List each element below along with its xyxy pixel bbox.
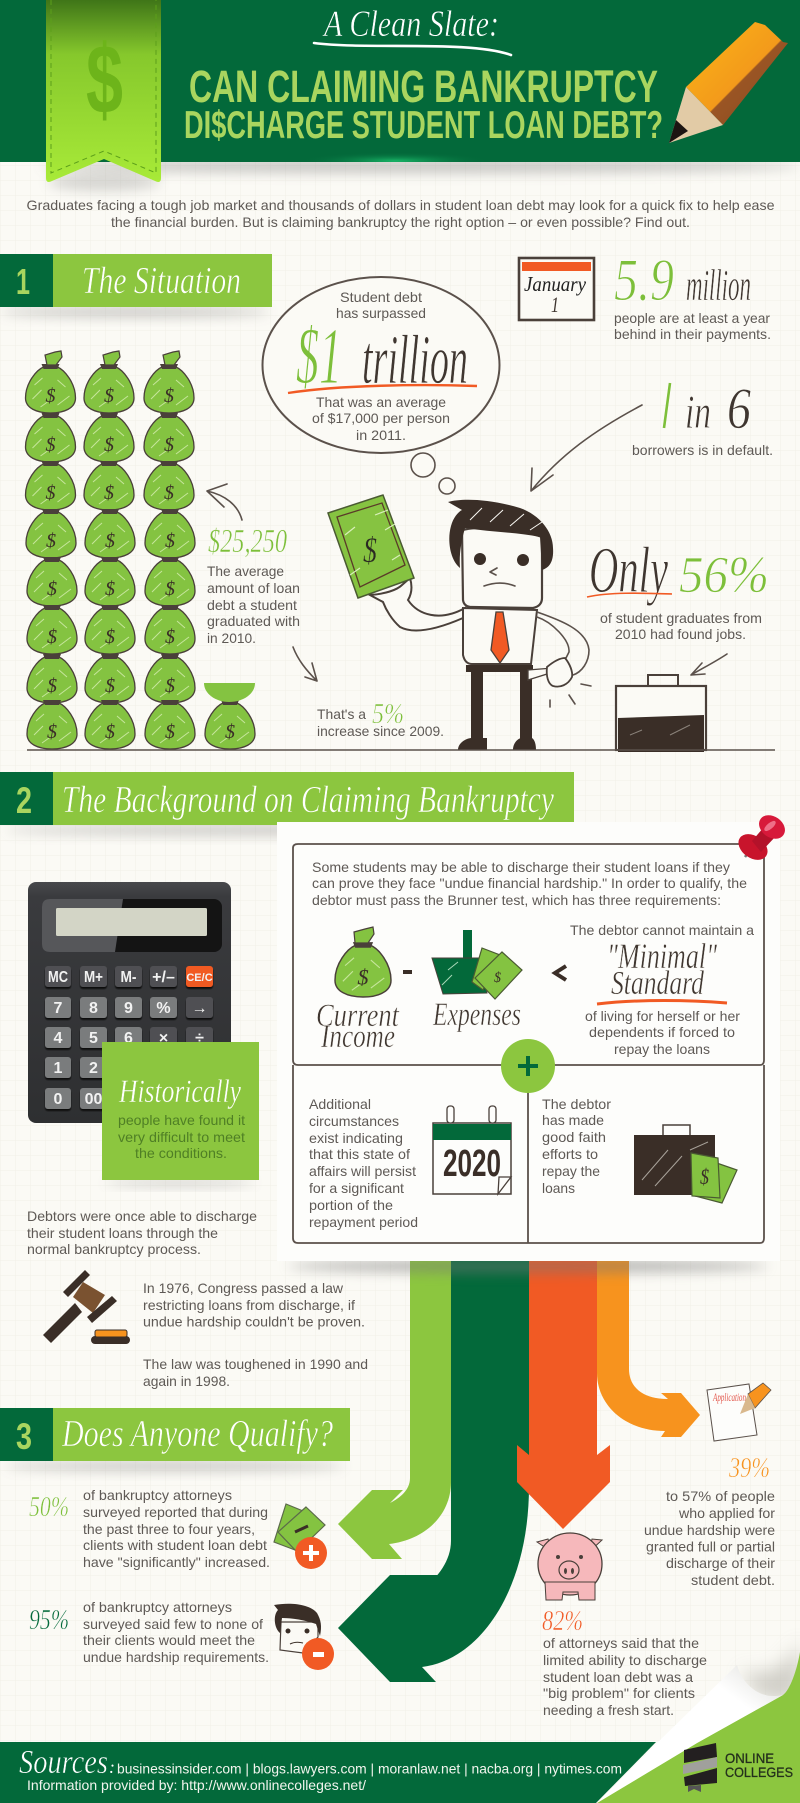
stat: $25,250: graduated with xyxy=(207,613,300,629)
section 2 heading: The Background on Claiming Bankruptcy xyxy=(62,779,554,821)
stat: only 56%: 2010 had found jobs. xyxy=(615,626,746,642)
callout: historically: very difficult to meet xyxy=(118,1129,245,1145)
stat: only 56%: Only xyxy=(589,534,668,607)
keypad: MC xyxy=(48,969,68,986)
thought bubble: $1 trillion: has surpassed xyxy=(336,305,426,321)
stat: 5.9 million: people are at least a year xyxy=(614,310,770,326)
icon: calendar january: January xyxy=(524,272,587,296)
stat: 5% increase: increase since 2009. xyxy=(317,723,444,739)
requirement: minimal standard: Standard xyxy=(611,965,705,1002)
chart: money bag stacks: $ xyxy=(47,578,57,600)
ground line xyxy=(27,749,775,751)
intro text: can prove they face "undue financial hardship." In order to qualify, the xyxy=(312,875,747,891)
callout: historically xyxy=(102,1042,259,1186)
icon: calendar 2020: 2020 xyxy=(443,1143,501,1185)
sources: Sources xyxy=(19,1744,108,1781)
arrows: flowing from the panel xyxy=(338,1261,700,1682)
section 3 heading: 3 xyxy=(16,1416,32,1457)
chart: money bag stacks: $ xyxy=(165,530,175,552)
chart: money bag stacks: $ xyxy=(104,434,114,456)
keypad: CE/C xyxy=(186,972,213,984)
chart: money bag stacks: $ xyxy=(165,675,175,697)
section 2 heading xyxy=(0,772,574,835)
stat: 39%: discharge of their xyxy=(666,1555,775,1571)
chart: money bag stacks: $ xyxy=(164,482,174,504)
arrow: orange to 39% xyxy=(597,1261,700,1437)
section 1 heading: 1 xyxy=(16,261,30,302)
stat: 5% increase xyxy=(317,699,444,739)
callout: historically: the conditions. xyxy=(135,1145,227,1161)
intro text: debtor must pass the Brunner test, which has three requirements: xyxy=(312,892,721,908)
requirement: additional circumstances: for a significant xyxy=(309,1180,404,1196)
intro text: Some students may be able to discharge their student loans if they xyxy=(312,859,730,875)
header banner xyxy=(0,0,800,173)
ribbon with dollar sign xyxy=(46,0,161,191)
callout: historically: Historically xyxy=(118,1074,241,1110)
stat: 95% of attorneys: surveyed said few to none of xyxy=(83,1616,263,1632)
stat: 50% of attorneys: surveyed reported that during xyxy=(83,1504,268,1520)
chart: money bag stacks: $ xyxy=(47,721,57,743)
keypad: × xyxy=(159,1030,168,1047)
thought bubble: $1 trillion: trillion xyxy=(362,322,468,399)
stat: 82% of attorneys xyxy=(542,1605,707,1718)
stat: 1 in 6: in xyxy=(685,386,711,439)
keypad: +/– xyxy=(152,969,175,986)
keypad: 2 xyxy=(89,1060,98,1077)
chart: money bag stacks xyxy=(26,351,255,749)
stat: only 56%: of student graduates from xyxy=(600,610,762,626)
icon: briefcase partly filled xyxy=(616,675,706,752)
stat: $25,250: in 2010. xyxy=(207,630,256,646)
raised arm and hand xyxy=(370,578,465,630)
requirement: additional circumstances: Additional xyxy=(309,1096,371,1112)
section 3 heading: Does Anyone Qualify? xyxy=(61,1413,333,1455)
text: 1976 law history xyxy=(143,1280,368,1389)
thought bubble: $1 trillion: That was an average xyxy=(316,394,446,410)
requirement: good faith efforts: has made xyxy=(542,1112,604,1128)
requirement: additional circumstances: repayment period xyxy=(309,1214,418,1230)
illustration: worried man holding a bill xyxy=(328,495,591,750)
keypad: 4 xyxy=(54,1030,63,1047)
keypad: 9 xyxy=(124,1000,133,1017)
logo: online colleges xyxy=(683,1743,793,1792)
chart: money bag stacks: $ xyxy=(225,721,235,743)
text: debtors once able: normal bankruptcy process. xyxy=(27,1241,201,1257)
stat: 39% xyxy=(644,1452,775,1588)
icon: basket with money, expenses xyxy=(432,930,522,1033)
stat: only 56%: 56% xyxy=(679,547,769,604)
stat: 39%: who applied for xyxy=(678,1505,775,1521)
icon: briefcase with money: $ xyxy=(700,1164,709,1189)
icon: calculator xyxy=(28,882,231,1123)
sources: Information provided by: http://www.onlinecolleges.net/ xyxy=(27,1777,366,1793)
icon: money bag, current income: $ xyxy=(357,965,369,990)
sources xyxy=(19,1744,622,1793)
chart: money bag stacks: $ xyxy=(46,434,56,456)
requirement: good faith efforts: loans xyxy=(542,1180,575,1196)
keypad: 00 xyxy=(85,1091,102,1108)
chart: money bag stacks: $ xyxy=(104,385,114,407)
chart: money bag stacks: $ xyxy=(46,530,56,552)
chart: money bag stacks: $ xyxy=(46,482,56,504)
icon: pencil xyxy=(669,22,788,143)
chart: money bag stacks: $ xyxy=(165,721,175,743)
stat: 1 in 6: borrowers is in default. xyxy=(632,442,773,458)
stat: 50% of attorneys: have "significantly" increased. xyxy=(83,1554,270,1570)
thought bubble: $1 trillion: Student debt xyxy=(340,289,422,305)
chart: money bag stacks: $ xyxy=(105,578,115,600)
keypad: % xyxy=(156,1000,171,1017)
arrow: to 5% increase xyxy=(293,647,317,681)
stat: 95% of attorneys: their clients would meet the xyxy=(83,1632,255,1648)
stat: 1 in 6 xyxy=(632,376,773,458)
section 1 heading xyxy=(0,254,272,317)
stat: 50% of attorneys: 50% xyxy=(29,1492,69,1523)
keypad: 0 xyxy=(54,1091,63,1108)
stat: 5.9 million: behind in their payments. xyxy=(614,326,771,342)
stat: $25,250: debt a student xyxy=(207,597,297,613)
stat: $25,250: The average xyxy=(207,563,284,579)
chart: money bag stacks: $ xyxy=(46,385,56,407)
arrow: to money bags xyxy=(207,484,242,520)
chart: money bag stacks: $ xyxy=(164,385,174,407)
stat: 82% of attorneys: student loan debt was a xyxy=(543,1669,693,1685)
sources: businessinsider.com | blogs.lawyers.com | moranlaw.net | nacba.org | nytimes.com xyxy=(117,1760,622,1776)
chart: money bag stacks: $ xyxy=(165,578,175,600)
keypad xyxy=(45,966,213,1109)
text: 1976 law history: again in 1998. xyxy=(143,1373,230,1389)
footer with page curl xyxy=(0,1640,800,1803)
stat: 39%: undue hardship were xyxy=(644,1522,775,1538)
icon: money bag, current income xyxy=(316,927,400,1055)
arrow: light green to 50% xyxy=(338,1261,451,1559)
chart: money bag stacks: $ xyxy=(164,434,174,456)
intro text xyxy=(26,197,775,230)
keypad: 6 xyxy=(124,1030,133,1047)
icon: worried face with minus xyxy=(274,1604,334,1670)
arrow: red-orange to 82% xyxy=(517,1261,610,1529)
requirement: minimal standard: The debtor cannot maintain a xyxy=(570,922,754,938)
requirement: good faith efforts: repay the xyxy=(542,1163,600,1179)
requirement: additional circumstances: portion of the xyxy=(309,1197,393,1213)
text: 1976 law history: restricting loans from discharge, if xyxy=(143,1297,355,1313)
stat: 5.9 million: 5.9 xyxy=(614,247,674,313)
stat: 50% of attorneys: clients with student loan debt xyxy=(83,1537,267,1553)
chart: money bag stacks: $ xyxy=(105,721,115,743)
stat: 5% increase: That's a xyxy=(317,706,366,722)
stat: 5% increase: 5% xyxy=(372,699,404,730)
logo: online colleges: COLLEGES xyxy=(725,1764,793,1780)
icon: application with pencil: Application xyxy=(712,1390,746,1404)
thought bubble: $1 trillion: $1 xyxy=(296,313,342,401)
subtitle: a clean slate: A Clean Slate: xyxy=(322,4,499,45)
plus circle xyxy=(501,1039,555,1093)
stat: $25,250: $25,250 xyxy=(208,523,287,560)
requirement: additional circumstances: that this state of xyxy=(309,1146,410,1162)
requirement: minimal standard xyxy=(570,922,754,1057)
bill held up: $ xyxy=(363,530,377,570)
requirement: additional circumstances xyxy=(309,1096,418,1230)
requirement: good faith efforts xyxy=(542,1096,611,1196)
text: debtors once able: Debtors were once able to discharge xyxy=(27,1208,257,1224)
icon: calendar january xyxy=(519,258,594,320)
torso xyxy=(463,608,537,664)
stat: 82% of attorneys: needing a fresh start. xyxy=(543,1702,674,1718)
minus sign xyxy=(403,970,412,974)
requirement: additional circumstances: affairs will persist xyxy=(309,1163,416,1179)
title xyxy=(184,4,663,147)
lowered arm, hand and empty pocket xyxy=(528,612,591,707)
face xyxy=(474,553,529,586)
section 3 heading xyxy=(0,1408,350,1471)
text: 1976 law history: The law was toughened in 1990 and xyxy=(143,1356,368,1372)
stat: $25,250 xyxy=(207,523,300,646)
section 2 heading: 2 xyxy=(16,780,32,821)
ribbon with dollar sign: $ xyxy=(86,24,123,134)
text: debtors once able xyxy=(27,1208,257,1257)
intro text xyxy=(312,859,747,908)
arrow: dark green to 95% xyxy=(338,1261,529,1682)
requirement: additional circumstances: circumstances xyxy=(309,1113,399,1129)
keypad: M+ xyxy=(84,969,103,986)
head xyxy=(462,527,542,608)
text: 1976 law history: undue hardship couldn't be proven. xyxy=(143,1314,365,1330)
keypad: 1 xyxy=(54,1060,63,1077)
chart: money bag stacks: $ xyxy=(47,626,57,648)
keypad: 7 xyxy=(54,1000,63,1017)
stat: 82% of attorneys: 82% xyxy=(542,1605,583,1637)
section 1 heading: The Situation xyxy=(82,260,241,302)
stat: 39%: student debt. xyxy=(691,1572,775,1588)
stat: 95% of attorneys xyxy=(29,1599,269,1665)
icon: money with plus xyxy=(274,1504,327,1569)
tie xyxy=(491,612,509,663)
thought bubble: $1 trillion: of $17,000 per person xyxy=(312,410,450,426)
chart: money bag stacks: $ xyxy=(105,626,115,648)
text: debtors once able: their student loans through the xyxy=(27,1225,218,1241)
requirement: minimal standard: "Minimal" xyxy=(607,936,718,976)
stat: 50% of attorneys: of bankruptcy attorneys xyxy=(83,1487,232,1503)
belt and legs xyxy=(458,665,536,750)
stat: 39%: 39% xyxy=(728,1452,770,1484)
icon: piggy bank xyxy=(537,1533,602,1600)
thought bubble: $1 trillion: in 2011. xyxy=(356,427,406,443)
stat: 50% of attorneys: the past three to four years, xyxy=(83,1521,255,1537)
icon: basket with money, expenses: Expenses xyxy=(432,997,521,1033)
text: 1976 law history: In 1976, Congress passed a law xyxy=(143,1280,344,1296)
stat: only 56% xyxy=(587,534,769,642)
icon: calendar 2020 xyxy=(433,1106,511,1194)
icon: money bag, current income: Income xyxy=(320,1019,395,1055)
bill held up xyxy=(328,495,414,598)
icon: application with pencil xyxy=(707,1383,771,1441)
arrow: 1 in 6 to man xyxy=(531,405,642,491)
requirement: additional circumstances: exist indicating xyxy=(309,1130,403,1146)
arrow: to briefcase xyxy=(691,654,727,675)
stat: 5.9 million xyxy=(614,247,771,342)
hair xyxy=(448,500,553,570)
callout: historically: people have found it xyxy=(118,1112,245,1128)
chart: money bag stacks: $ xyxy=(104,482,114,504)
stat: 39%: granted full or partial xyxy=(646,1538,775,1554)
requirement: minimal standard: of living for herself or her xyxy=(585,1008,740,1024)
chart: money bag stacks: $ xyxy=(47,675,57,697)
stat: 95% of attorneys: of bankruptcy attorneys xyxy=(83,1599,232,1615)
stat: 82% of attorneys: of attorneys said that the xyxy=(543,1635,699,1651)
intro text: the financial burden. But is claiming bankruptcy the right option – or even possible? Find out. xyxy=(111,214,690,230)
subtitle: a clean slate xyxy=(314,4,511,55)
chart: money bag stacks: $ xyxy=(105,530,115,552)
requirement: minimal standard: repay the loans xyxy=(614,1041,710,1057)
chart: money bag stacks: $ xyxy=(105,675,115,697)
icon: money bag, current income: Current xyxy=(316,998,400,1034)
stat: 95% of attorneys: undue hardship requirements. xyxy=(83,1649,269,1665)
icon: basket with money, expenses: $ xyxy=(494,970,501,986)
stat: 1 in 6: 6 xyxy=(727,376,751,441)
stat: 50% of attorneys xyxy=(29,1487,270,1570)
icon: push pin xyxy=(734,810,789,865)
keypad: → xyxy=(192,1000,208,1017)
requirement: good faith efforts: good faith xyxy=(542,1129,606,1145)
keypad: 5 xyxy=(89,1030,98,1047)
stat: 39%: to 57% of people xyxy=(666,1488,775,1504)
requirement: minimal standard: dependents if forced to xyxy=(589,1024,735,1040)
chart: money bag stacks: $ xyxy=(165,626,175,648)
thought bubble: $1 trillion xyxy=(262,277,500,494)
keypad: 8 xyxy=(89,1000,98,1017)
less-than sign xyxy=(555,966,566,980)
stat: $25,250: amount of loan xyxy=(207,580,300,596)
sources: : xyxy=(109,1757,115,1777)
requirement: good faith efforts: efforts to xyxy=(542,1146,598,1162)
icon: calendar january: 1 xyxy=(551,292,559,317)
stat: 95% of attorneys: 95% xyxy=(29,1605,69,1636)
keypad: M- xyxy=(120,969,136,986)
intro text: Graduates facing a tough job market and thousands of dollars in student loan debt may look for a quick fix to help ease xyxy=(26,197,775,213)
logo: online colleges: ONLINE xyxy=(725,1750,774,1766)
requirement: good faith efforts: The debtor xyxy=(542,1096,611,1112)
stat: 82% of attorneys: "big problem" for clients xyxy=(543,1685,695,1701)
panel: Brunner test xyxy=(277,810,789,1273)
icon: briefcase with money xyxy=(634,1125,737,1203)
icon: gavel xyxy=(43,1270,130,1344)
keypad: ÷ xyxy=(195,1030,204,1047)
stat: 82% of attorneys: limited ability to discharge xyxy=(543,1652,707,1668)
